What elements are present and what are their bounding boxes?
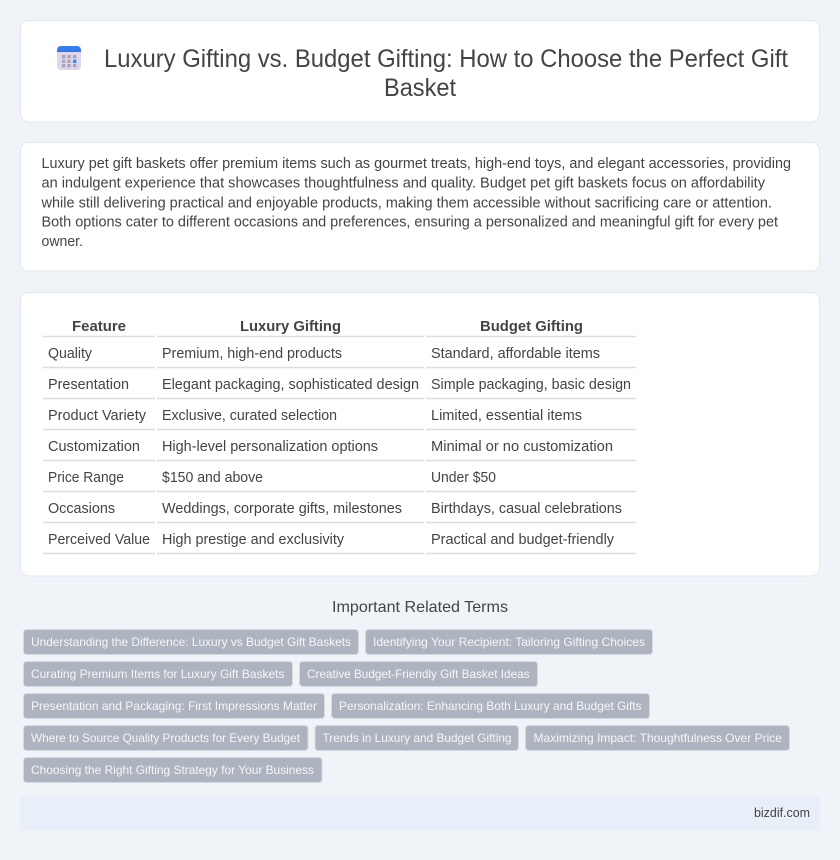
title: Luxury Gifting vs. Budget Gifting: How to Choose the Perfect Gift [104, 45, 788, 73]
table header: Feature [72, 319, 126, 335]
table row: price range: $150 and above [162, 470, 263, 486]
tag [24, 758, 322, 782]
tag: Understanding the Difference: Luxury vs Budget Gift Baskets [31, 635, 351, 649]
tag: Choosing the Right Gifting Strategy for Your Business [31, 763, 314, 777]
tag: Curating Premium Items for Luxury Gift Baskets [31, 667, 284, 681]
table row: occasions: Weddings, corporate gifts, milestones [162, 501, 402, 517]
table header: Budget Gifting [480, 319, 583, 335]
tag [315, 726, 518, 750]
table row: perceived value: Practical and budget-friendly [431, 532, 615, 548]
table row: presentation [48, 377, 631, 393]
text block: summary: while still delivering practical and enjoyable products, making them accessible without sacrificing care or attention. [40, 196, 772, 212]
tag [526, 726, 790, 750]
footer [20, 796, 820, 830]
text block: summary [40, 156, 791, 250]
table row: perceived value: Perceived Value [48, 532, 150, 548]
tag [366, 630, 652, 654]
table row: customization [48, 439, 613, 455]
table row: occasions: Birthdays, casual celebrations [431, 501, 622, 517]
table row: price range: Under $50 [431, 470, 496, 486]
tag: Presentation and Packaging: First Impressions Matter [31, 699, 317, 713]
panel: title header [20, 20, 820, 122]
table row: quality: Quality [48, 346, 93, 362]
table row: perceived value [48, 532, 615, 548]
table row: quality: Premium, high-end products [162, 346, 342, 362]
table row: price range [48, 470, 496, 486]
table header: Luxury Gifting [240, 319, 341, 335]
text block: summary: Luxury pet gift baskets offer premium items such as gourmet treats, high-end toys, and elegant accessories, providing [42, 156, 791, 172]
table row: presentation: Elegant packaging, sophisticated design [162, 377, 419, 393]
table row: product variety [48, 408, 582, 424]
table row: price range: Price Range [48, 470, 124, 486]
tag [332, 694, 650, 718]
tag [24, 726, 308, 750]
tag: Trends in Luxury and Budget Gifting [322, 731, 512, 745]
text block: summary: an indulgent experience that showcases thoughtfulness and quality. Budget pet gift baskets focus on affordability [42, 176, 766, 192]
table row: customization: High-level personalization options [162, 439, 378, 455]
table row: presentation: Presentation [48, 377, 129, 393]
table row: product variety: Limited, essential items [431, 408, 582, 424]
table header [72, 319, 583, 335]
heading: important related terms: Important Related Terms [332, 599, 508, 616]
tag [24, 694, 324, 718]
tag: Maximizing Impact: Thoughtfulness Over Price [534, 731, 782, 745]
footer: bizdif.com [754, 806, 810, 820]
panel: related term tags [24, 630, 790, 782]
table row: occasions [48, 501, 622, 517]
table row: product variety: Product Variety [48, 408, 147, 424]
table row: customization: Customization [48, 439, 140, 455]
panel: comparison table [20, 292, 820, 576]
table row: perceived value: High prestige and exclusivity [162, 532, 345, 548]
tag [300, 662, 538, 686]
table row: presentation: Simple packaging, basic design [431, 377, 631, 393]
table row: quality [48, 346, 600, 362]
tag: Identifying Your Recipient: Tailoring Gifting Choices [373, 635, 645, 649]
tag: Personalization: Enhancing Both Luxury and Budget Gifts [339, 699, 642, 713]
text block: summary: Both options cater to different occasions and preferences, ensuring a personalized and meaningful gift for every pet [42, 215, 778, 231]
title: Basket [384, 74, 456, 102]
tag: Where to Source Quality Products for Every Budget [31, 731, 301, 745]
table row: quality: Standard, affordable items [431, 346, 600, 362]
panel: summary paragraph [20, 142, 820, 271]
icon: calendar [57, 46, 81, 70]
table row: customization: Minimal or no customization [431, 439, 613, 455]
text block: summary: owner. [42, 234, 83, 250]
tag [24, 630, 358, 654]
table row: product variety: Exclusive, curated selection [162, 408, 337, 424]
title [104, 45, 788, 102]
table row: occasions: Occasions [48, 501, 115, 517]
tag: Creative Budget-Friendly Gift Basket Ideas [307, 667, 530, 681]
tag [24, 662, 292, 686]
